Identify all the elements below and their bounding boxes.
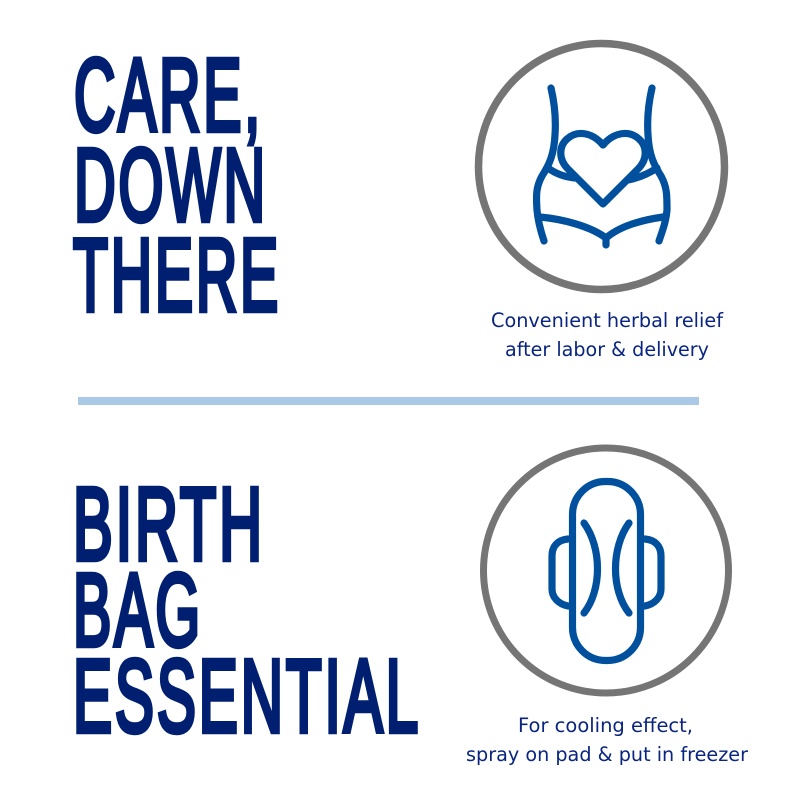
caption: herbal relief xyxy=(491,309,724,361)
divider xyxy=(78,397,699,405)
caption: cooling effect: spray on pad & put in freezer xyxy=(466,743,749,766)
heading: Birth Bag Essential: BAG xyxy=(73,552,203,668)
heading: Care, Down There: DOWN xyxy=(74,128,268,242)
icon: belly with heart in circle xyxy=(478,44,724,290)
caption: herbal relief: after labor & delivery xyxy=(505,338,709,361)
heading: Care, Down There: CARE, xyxy=(74,38,263,152)
caption: cooling effect: For cooling effect, xyxy=(518,714,693,737)
caption: herbal relief: Convenient herbal relief xyxy=(491,309,724,332)
caption: cooling effect xyxy=(466,714,749,766)
heading: Birth Bag Essential: ESSENTIAL xyxy=(73,638,421,754)
icon: pad in circle xyxy=(484,448,728,693)
heading: Care, Down There xyxy=(73,38,281,332)
heading: Birth Bag Essential xyxy=(73,466,421,754)
heading: Birth Bag Essential: BIRTH xyxy=(73,466,265,582)
heading: Care, Down There: THERE xyxy=(73,218,281,332)
